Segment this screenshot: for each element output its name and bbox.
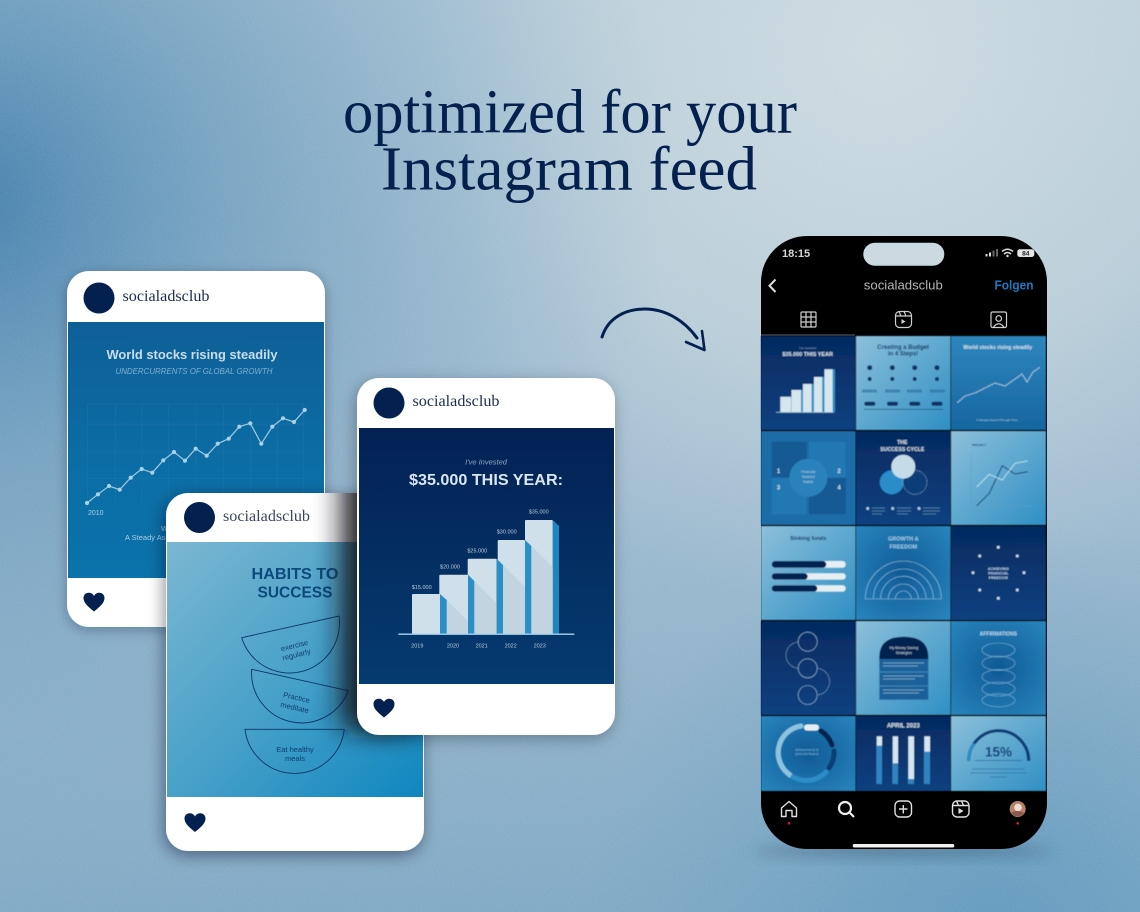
phone shadow [754, 846, 1054, 856]
panel: phone mockup [761, 236, 1047, 849]
thumbnail: financial habits quadrants: 1 [777, 469, 781, 475]
bar chart: $35.000 [529, 509, 549, 515]
post caption: World Stock Market [161, 524, 227, 533]
bowl: exercise regularly: regularly [281, 647, 312, 662]
thumbnail: money saving strategies: My Money Saving [890, 646, 918, 650]
avatar [374, 388, 404, 418]
bowl: practice meditate: Practice [282, 690, 311, 705]
thumbnail: sinking funds: Sinking funds [790, 536, 826, 542]
thumbnail: april 2023 bars [856, 716, 950, 791]
thumbnail: financial habits quadrants: Stacked [802, 475, 815, 479]
bar chart: $15.000 [412, 585, 432, 591]
thumbnail: financial habits quadrants: Habits [803, 480, 814, 484]
panel: post card invested this year [357, 378, 615, 735]
thumbnail: growth and freedom: FREEDOM [890, 545, 917, 551]
bowl: eat healthy meals: meals [285, 754, 305, 763]
arrow: curved to phone [602, 309, 704, 350]
thumbnail: the success cycle: THE [897, 440, 908, 446]
bar chart: 2023 [534, 643, 546, 649]
thumbnail: creating a budget: Creating a Budget [877, 345, 929, 351]
thumbnail: ring chart: personal finance [795, 752, 819, 756]
post heading: World stocks rising steadily [106, 347, 278, 362]
thumbnail: growth and freedom [856, 526, 950, 620]
status bar: 84 [1022, 251, 1030, 258]
bowl: eat healthy meals [245, 729, 344, 773]
thumbnail: flow circles [761, 621, 856, 715]
thumbnail: sinking funds [761, 526, 856, 620]
panel: post card world stocks [67, 271, 325, 627]
home indicator [853, 844, 954, 848]
icon: heart [374, 699, 394, 718]
thumbnail: world stocks: World stocks rising steadily [963, 345, 1032, 351]
thumbnail: creating a budget: in 4 Steps! [888, 352, 918, 358]
thumbnail: achieving financial freedom [951, 526, 1046, 620]
profile header: Folgen [994, 278, 1034, 292]
thumbnail: ring chart [761, 716, 856, 791]
post heading: HABITS TO [252, 566, 338, 583]
thumbnail: money saving strategies [856, 621, 950, 715]
post image [68, 322, 324, 578]
bowl: exercise regularly [242, 616, 339, 673]
thumbnail: 15 percent gauge: 15% [985, 745, 1012, 760]
shadow of top post on habits card [340, 395, 410, 730]
bar chart: $25.000 [467, 549, 487, 555]
bowl: eat healthy meals: Eat healthy [276, 745, 314, 754]
post caption: A Steady Ascent [125, 533, 181, 542]
title: optimized for your [343, 78, 797, 146]
thumbnail: growth and freedom: GROWTH & [888, 536, 919, 542]
avatar [184, 502, 215, 533]
username: socialadsclub [122, 288, 210, 305]
thumbnail: affirmations [951, 621, 1046, 715]
post heading: $35.000 THIS YEAR: [409, 472, 563, 489]
thumbnail: achieving financial freedom: FINANCIAL [988, 572, 1009, 576]
username: socialadsclub [223, 508, 310, 525]
icon: reels [952, 801, 969, 817]
bar chart: $20.000 [440, 565, 460, 571]
bar chart [398, 509, 574, 649]
profile header [770, 278, 1034, 292]
panel: post card habits to success [166, 493, 424, 851]
bottom navigation [782, 801, 1026, 848]
thumbnail: achieving financial freedom: FREEDOM [989, 576, 1008, 580]
thumbnail: ring chart: Achievements in [795, 748, 819, 752]
thumbnail grid [761, 336, 1046, 791]
title: Instagram feed [381, 136, 757, 204]
thumbnail: april 2023 bars: APRIL 2023 [887, 723, 920, 729]
bowl: practice meditate: meditate [280, 700, 310, 715]
thumbnail: financial habits quadrants [761, 431, 856, 525]
icon: heart [184, 813, 206, 832]
thumbnail: financial habits quadrants: 2 [837, 469, 841, 475]
thumbnail: creating a budget [856, 336, 950, 430]
icon: home [782, 802, 796, 816]
thumbnail: world stocks [951, 336, 1046, 430]
icon: heart [84, 593, 104, 612]
thumbnail: world stocks: A Steady Ascent Through Time [976, 418, 1018, 422]
title [343, 78, 797, 204]
thumbnail: financial habits quadrants: 4 [837, 486, 841, 492]
line chart: 2010 [88, 510, 104, 517]
thumbnail: the success cycle: SUCCESS CYCLE [880, 447, 925, 453]
notification dots [788, 822, 1019, 825]
status bar [782, 243, 1034, 266]
thumbnail: invested chart: $35.000 THIS YEAR [782, 352, 833, 358]
username: socialadsclub [412, 393, 500, 410]
thumbnail: the success cycle [856, 431, 950, 525]
post heading: SUCCESS [258, 584, 333, 602]
bar chart: $30.000 [497, 529, 517, 535]
bar chart: 2022 [505, 643, 517, 649]
bar chart: 2019 [411, 643, 423, 649]
thumbnail: money saving strategies: Strategies [896, 651, 912, 655]
icon: create [895, 801, 912, 817]
post caption [125, 524, 227, 542]
bowl: practice meditate [252, 669, 348, 723]
thumbnail: line chart: PROJECT [972, 443, 986, 447]
bar chart: 2020 [447, 643, 459, 649]
thumbnail: affirmations: AFFIRMATIONS [980, 632, 1018, 638]
bowl: exercise regularly: exercise [280, 638, 309, 653]
avatar [84, 282, 114, 314]
icon: profile avatar [1010, 801, 1026, 817]
line chart [85, 404, 307, 517]
post image [359, 428, 614, 684]
post heading [252, 566, 338, 602]
thumbnail: invested chart: I've invested [799, 346, 816, 350]
thumbnail: financial habits quadrants: 3 [777, 486, 781, 492]
post image [167, 542, 423, 797]
bar chart: 2021 [476, 643, 488, 649]
thumbnail: line chart [951, 431, 1046, 525]
thumbnail: invested chart [761, 336, 856, 430]
profile header: socialadsclub [864, 278, 943, 292]
post subheading: UNDERCURRENTS OF GLOBAL GROWTH [116, 367, 273, 376]
tab icons [801, 312, 1006, 328]
icon: search [839, 802, 854, 817]
post kicker: I've Invested [465, 458, 508, 466]
thumbnail: 15 percent gauge [951, 716, 1046, 791]
thumbnail: achieving financial freedom: ACHIEVING [988, 567, 1009, 571]
status bar: 18:15 [782, 248, 810, 260]
thumbnail: financial habits quadrants: Financial [801, 470, 816, 474]
